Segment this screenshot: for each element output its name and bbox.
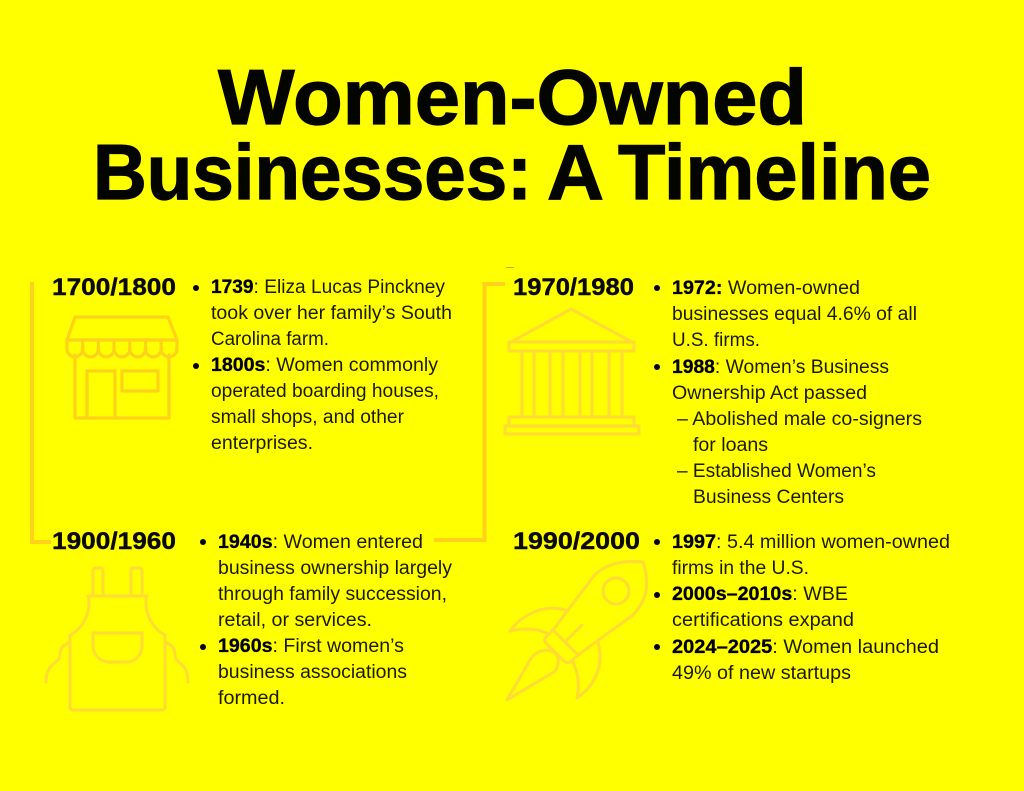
timeline connector: centre [434, 284, 505, 540]
bullet list: 1700/1800: operated boarding houses, [211, 381, 439, 402]
bullet list: 1700/1800: Carolina farm. [211, 329, 329, 350]
panel: 1990/2000 [507, 528, 950, 700]
bullet list: 1990/2000: 49% of new startups [672, 663, 851, 684]
bullet list: 1900/1960: business ownership largely [218, 558, 453, 579]
bullet list: 1700/1800: 1800s: Women commonly [211, 355, 439, 376]
bullet list: 1970/1980: – Abolished male co-signers [677, 409, 922, 430]
heading: 1970/1980: 1970/1980 [513, 274, 634, 301]
bullet list: 1970/1980 [654, 278, 922, 508]
bullet list: 1900/1960: 1960s: First women’s [218, 636, 404, 657]
bullet list: 1970/1980: 1988: Women’s Business [672, 357, 889, 378]
bullet list: 1970/1980: – Established Women’s [677, 461, 876, 482]
bullet list: 1700/1800 [193, 277, 452, 454]
bullet list: 1990/2000: certifications expand [672, 610, 854, 631]
bullet list: 1970/1980: businesses equal 4.6% of all [672, 304, 917, 325]
bullet list: 1900/1960: formed. [218, 688, 285, 709]
title: A [547, 128, 604, 216]
icon: rocket [507, 561, 647, 700]
bullet list: 1970/1980: U.S. firms. [672, 330, 760, 351]
bullet list: 1700/1800: took over her family’s South [211, 303, 452, 324]
title: Businesses: [93, 128, 532, 216]
heading: 1900/1960: 1900/1960 [52, 528, 176, 555]
bullet list: 1900/1960: through family succession, [218, 584, 447, 605]
heading: 1700/1800: 1700/1800 [52, 274, 176, 301]
bullet list: 1970/1980: Ownership Act passed [672, 383, 867, 404]
bullet list: 1900/1960: 1940s: Women entered [218, 532, 423, 553]
bullet list: 1990/2000: firms in the U.S. [672, 558, 809, 579]
panel: 1970/1980 [505, 274, 922, 508]
bullet list: 1970/1980: for loans [693, 435, 768, 456]
bullet list: 1900/1960 [200, 532, 453, 709]
bullet list: 1970/1980: Business Centers [693, 487, 844, 508]
bullet list: 1900/1960: business associations [218, 662, 407, 683]
panel: 1700/1800 [52, 274, 452, 454]
icon: apron [46, 568, 188, 710]
bullet list: 1990/2000: 2024–2025 : Women launched [672, 637, 939, 658]
panel: 1900/1960 [46, 528, 453, 710]
bullet list: 1900/1960: retail, or services. [218, 610, 372, 631]
bullet list: 1700/1800: enterprises. [211, 433, 313, 454]
icon: storefront [67, 317, 177, 418]
bullet list: 1700/1800: small shops, and other [211, 407, 405, 428]
bullet list: 1990/2000: 2000s–2010s: WBE [672, 584, 848, 605]
icon: bank building [505, 309, 639, 434]
heading: 1990/2000: 1990/2000 [513, 528, 640, 555]
bullet list: 1990/2000: 1997: 5.4 million women-owned [672, 532, 950, 553]
bullet list: 1990/2000 [654, 532, 950, 684]
title: Women-Owned [218, 53, 807, 141]
title: Timeline [618, 128, 931, 216]
bullet list: 1700/1800: 1739: Eliza Lucas Pinckney [211, 277, 446, 298]
timeline connector: left [32, 282, 51, 542]
bullet list: 1970/1980: 1972: Women-owned [672, 278, 860, 299]
title [93, 53, 931, 216]
